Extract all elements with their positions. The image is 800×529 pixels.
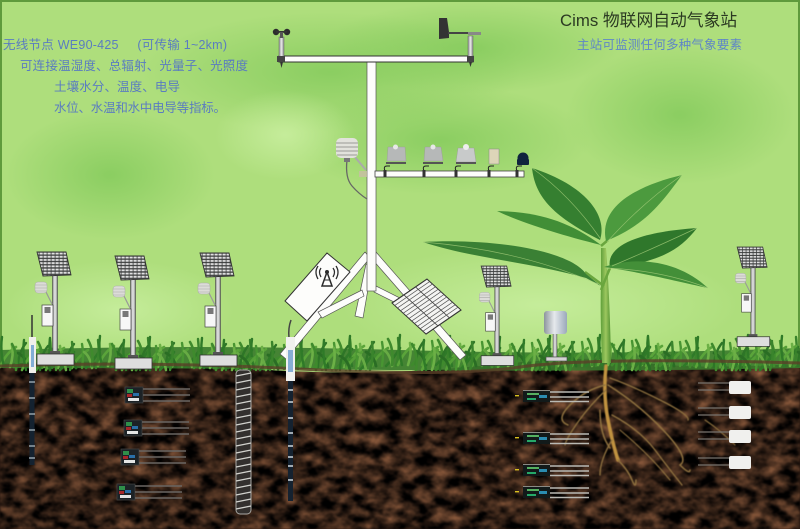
leaf: narrow left	[497, 211, 601, 245]
icon: wind vane	[439, 18, 481, 67]
stem	[601, 248, 611, 363]
rain gauge	[488, 149, 499, 177]
plant	[423, 168, 708, 363]
water or surface gauge	[544, 311, 567, 361]
leaf: top left	[532, 168, 602, 240]
grass band	[0, 335, 800, 373]
text block: wireless node description: 无线节点 WE90-425 (可传输 1~2km)	[3, 37, 227, 52]
mast sensor probe	[286, 320, 295, 501]
title: Cims 物联网自动气象站	[560, 11, 737, 30]
tripod legs	[280, 252, 466, 360]
icon: anemometer	[273, 29, 290, 68]
panel: large solar panel	[392, 279, 461, 334]
station 4	[479, 266, 514, 365]
text block: wireless node description: 水位、水温和水中电导等指标。	[54, 100, 226, 115]
plant roots	[562, 366, 735, 485]
lower instrument arm	[375, 171, 524, 177]
leaf veins	[423, 168, 708, 288]
station 3	[198, 253, 237, 366]
pyranometer 1	[384, 144, 406, 177]
subtitle: 主站可监测任何多种气象要素	[577, 37, 742, 52]
soil ground with texture	[0, 355, 800, 529]
text block: wireless node description	[3, 37, 248, 115]
top cross arm	[279, 56, 473, 62]
icon: instruments on arm	[384, 144, 529, 177]
mast pole	[367, 62, 376, 291]
station 5	[735, 247, 770, 346]
panel: wireless box with antenna icon	[285, 253, 350, 321]
soil sensors: white group	[698, 381, 751, 469]
screw-shaped pipe sensor	[236, 370, 251, 514]
blue sensor	[516, 152, 529, 177]
left soil profile probe	[29, 315, 36, 465]
pyranometer 2	[422, 144, 443, 177]
soil sensors: left group	[117, 387, 190, 500]
leaf: right upper	[610, 228, 697, 268]
text block: wireless node description: 可连接温湿度、总辐射、光量子、光照度	[20, 58, 248, 73]
station 2	[113, 256, 152, 369]
soil sensors: middle group	[515, 390, 589, 498]
leaf: top right	[605, 175, 682, 241]
station 1	[35, 252, 74, 365]
pyranometer 3	[454, 144, 476, 177]
leaf: long left	[423, 241, 601, 286]
central weather mast	[279, 56, 524, 360]
text block: wireless node description: 土壤水分、温度、电导	[54, 79, 180, 94]
icon: radiation shield temperature humidity sensor	[336, 138, 367, 199]
icon: antenna	[316, 266, 338, 286]
leaf: right lower	[604, 261, 708, 288]
